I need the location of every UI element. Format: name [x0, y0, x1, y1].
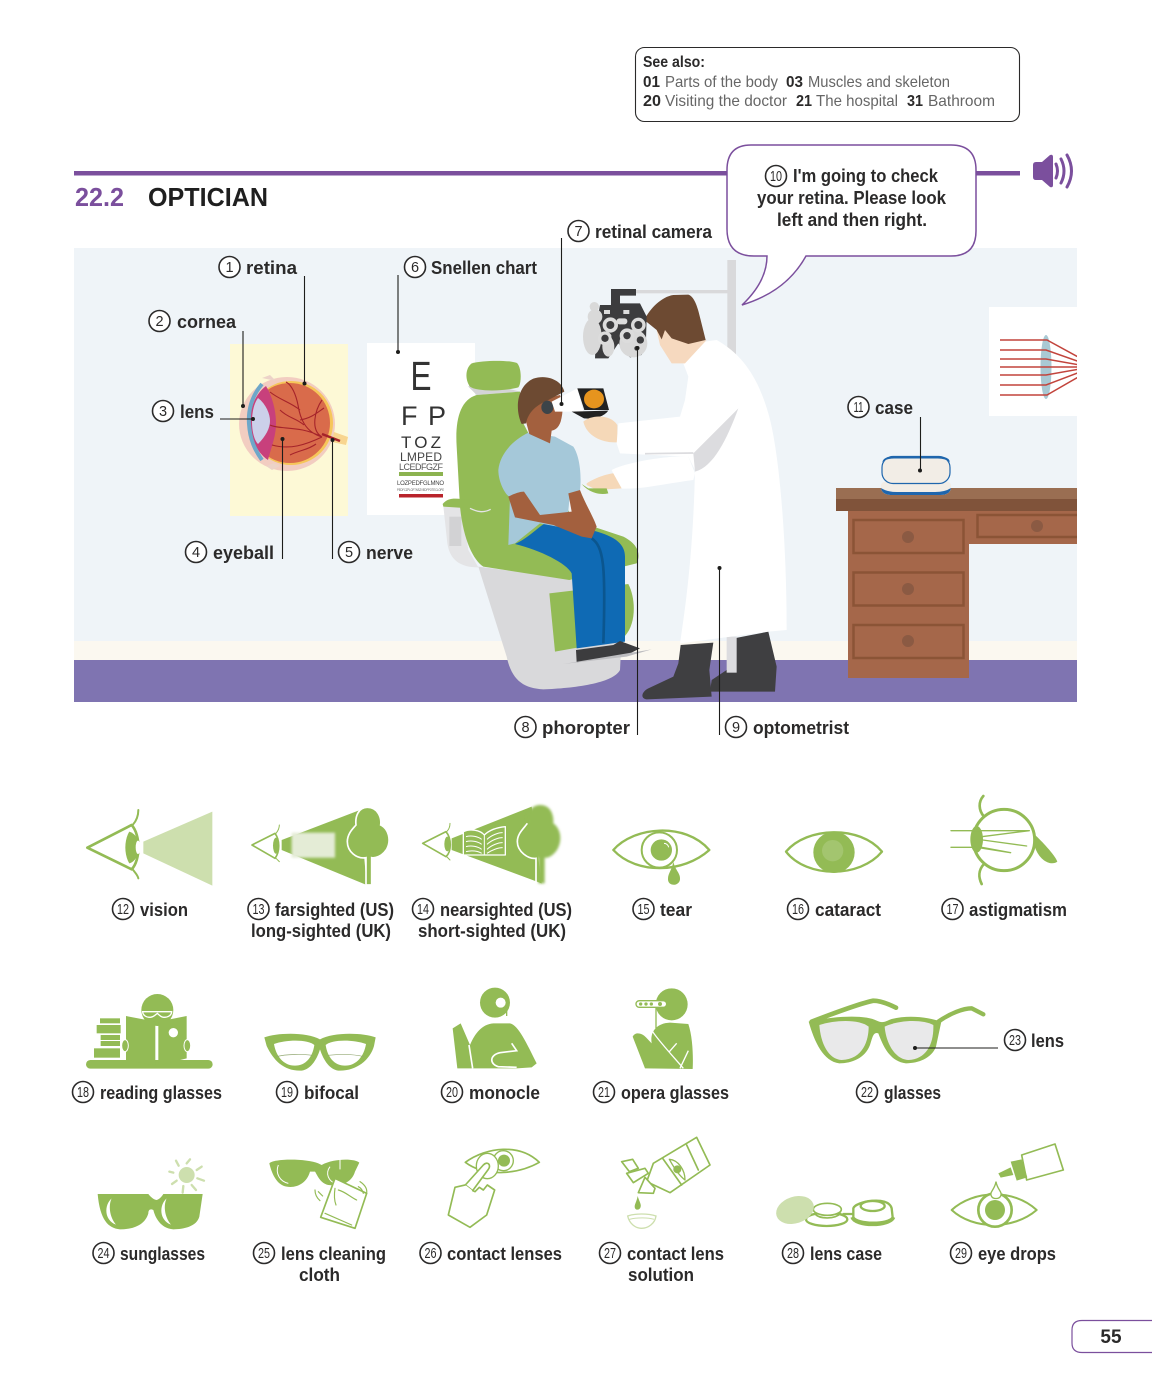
label: 9 optometrist: optometrist [753, 718, 849, 738]
glasses case [881, 456, 951, 495]
icon: lens case [772, 1191, 894, 1229]
label: 19 bifocal [276, 1082, 359, 1103]
label: 15 tear: tear [660, 900, 692, 920]
label: 21 opera glasses: 21 [598, 1085, 610, 1101]
label: 13 farsighted [248, 898, 394, 941]
panel: see also: Visiting the doctor [665, 93, 788, 110]
panel: see also: Muscles and skeleton [808, 74, 950, 91]
label: 21 opera glasses: opera glasses [621, 1083, 729, 1103]
speech bubble: 10 [770, 169, 782, 185]
label: 11 case: 11 [854, 400, 864, 416]
heading rule [74, 171, 1020, 176]
poster: Snellen chart: TOZ [401, 433, 441, 452]
label: 12 vision: vision [140, 900, 188, 920]
label: 14 nearsighted: nearsighted (US) [440, 900, 572, 920]
panel: see also: Bathroom [928, 93, 995, 110]
heading: 22.2 optician [75, 182, 268, 212]
patient [498, 377, 652, 664]
label: 14 nearsighted: short-sighted (UK) [418, 921, 566, 941]
label: 2 cornea [149, 310, 245, 408]
panel: see also: 03 [786, 74, 803, 91]
label: 18 reading glasses: 18 [77, 1085, 89, 1101]
panel: see also: 21 [796, 93, 812, 110]
label: 3 lens: lens [180, 402, 214, 422]
label: 24 sunglasses: sunglasses [120, 1244, 205, 1264]
label: 27 contact lens solution [600, 1242, 724, 1285]
label: 5 nerve: 5 [345, 545, 353, 561]
icon: cataract [786, 832, 882, 873]
label: 25 lens cleaning cloth: cloth [299, 1265, 340, 1285]
label: 25 lens cleaning cloth [254, 1242, 386, 1285]
label: 14 nearsighted: 14 [417, 902, 429, 918]
label: 28 lens case: lens case [810, 1244, 882, 1264]
label: 23 lens [913, 1030, 1064, 1051]
label: 24 sunglasses [93, 1242, 205, 1264]
icon: reading glasses [86, 994, 213, 1069]
label: 7 retinal camera [560, 220, 713, 406]
poster: Snellen chart: P [428, 401, 446, 431]
icon: lens cleaning cloth [269, 1158, 367, 1228]
label: 20 monocle [442, 1082, 540, 1103]
label: 1 retina [219, 256, 306, 386]
poster: Snellen chart: E [410, 353, 432, 399]
label: 4 eyeball: 4 [192, 545, 200, 561]
label: 20 monocle: monocle [469, 1083, 540, 1103]
panel: see also: See also: [643, 54, 705, 71]
label: 28 lens case [782, 1242, 882, 1264]
icon: contact lens solution [622, 1137, 710, 1228]
label: 24 sunglasses: 24 [98, 1246, 110, 1262]
panel: see also [636, 48, 1020, 122]
heading: 22.2 optician: 22.2 [75, 182, 124, 212]
chair [443, 361, 639, 689]
illustration: chair, patient, optometrist [443, 260, 787, 699]
label: 21 opera glasses [594, 1082, 729, 1103]
label: 5 nerve: nerve [366, 543, 413, 563]
icon: contact lenses [448, 1149, 539, 1227]
page number: 55 [1100, 1327, 1122, 1348]
label: 29 eye drops [950, 1242, 1056, 1264]
poster: Snellen chart: LOZPEDFGLMNO [397, 481, 444, 487]
label: 1 retina: 1 [225, 260, 234, 276]
retinal camera device [552, 388, 609, 419]
label: 22 glasses: 22 [861, 1085, 873, 1101]
speech bubble: your retina. Please look [757, 188, 947, 208]
instrument stand [636, 260, 736, 354]
label: 5 nerve [330, 438, 413, 563]
speech bubble: left and then right. [777, 210, 927, 230]
panel: optician room scene [74, 248, 1080, 702]
label: 29 eye drops: eye drops [978, 1244, 1056, 1264]
desk [836, 488, 1080, 678]
label: 7 retinal camera: retinal camera [595, 222, 713, 242]
phoropter [583, 289, 647, 358]
poster: Snellen chart: LCEDFGZF [399, 462, 444, 472]
label: 26 contact lenses: contact lenses [447, 1244, 562, 1264]
poster: eye anatomy [230, 344, 348, 516]
label: 8 phoropter: 8 [521, 720, 530, 736]
speech bubble [727, 145, 976, 305]
label: 22 glasses [856, 1082, 941, 1103]
label: 25 lens cleaning cloth: 25 [258, 1246, 270, 1262]
panel: see also: 20 [643, 93, 661, 110]
label: 11 case [848, 396, 922, 472]
poster: Snellen chart: F [401, 401, 418, 431]
label: 3 lens [152, 400, 255, 422]
label: 26 contact lenses: 26 [424, 1246, 436, 1262]
icon: farsighted [252, 807, 389, 885]
label: 2 cornea: 2 [155, 314, 164, 330]
label: 14 nearsighted [412, 898, 572, 941]
label: 17 astigmatism: 17 [946, 902, 958, 918]
label: 9 optometrist [718, 566, 849, 738]
poster: Snellen chart: PEDFCZPLOFTNSZVEDFPOTECLOPE [397, 488, 444, 492]
panel: see also: Parts of the body [665, 74, 778, 91]
label: 2 cornea: cornea [177, 312, 237, 332]
label: 1 retina: retina [246, 258, 298, 278]
poster: Snellen chart [367, 343, 475, 515]
label: 27 contact lens solution: 27 [604, 1246, 616, 1262]
label: 18 reading glasses: reading glasses [100, 1083, 222, 1103]
panel: see also: The hospital [816, 93, 898, 110]
panel: see also: 31 [907, 93, 923, 110]
icon: bifocal [264, 1034, 376, 1071]
label: 23 lens: 23 [1009, 1033, 1021, 1049]
label: 13 farsighted: 13 [252, 902, 264, 918]
label: 19 bifocal: bifocal [304, 1083, 359, 1103]
label: 6 Snellen chart [396, 256, 537, 354]
icon: sunglasses [98, 1159, 204, 1229]
speech bubble: I'm going to check [793, 166, 939, 186]
icon: opera glasses [633, 988, 693, 1069]
label: 8 phoropter [515, 346, 640, 738]
skirting [74, 641, 1077, 660]
label: 13 farsighted: farsighted (US) [275, 900, 394, 920]
label: 19 bifocal: 19 [281, 1085, 293, 1101]
label: 28 lens case: 28 [787, 1246, 799, 1262]
icon: eye drops [952, 1144, 1063, 1227]
icon: vision [87, 810, 212, 886]
heading: 22.2 optician: OPTICIAN [148, 182, 268, 212]
optometrist [582, 295, 787, 699]
icon: nearsighted [423, 805, 560, 883]
label: 8 phoropter: phoropter [542, 718, 630, 738]
label: 15 tear [633, 898, 692, 920]
label: 20 monocle: 20 [446, 1085, 458, 1101]
page number [1072, 1320, 1152, 1352]
label: 6 Snellen chart: Snellen chart [431, 258, 537, 278]
label: 27 contact lens solution: solution [628, 1265, 694, 1285]
label: 25 lens cleaning cloth: lens cleaning [281, 1244, 386, 1264]
icon: astigmatism [951, 796, 1057, 884]
wall [74, 248, 1077, 641]
label: 4 eyeball [186, 437, 284, 563]
label: 13 farsighted: long-sighted (UK) [251, 921, 391, 941]
label: 17 astigmatism [942, 898, 1067, 920]
label: 16 cataract: 16 [792, 902, 804, 918]
label: 3 lens: 3 [159, 404, 167, 420]
panel: see also: 01 [643, 74, 660, 91]
poster: lens diagram [989, 307, 1080, 416]
label: 16 cataract [788, 898, 881, 920]
icon: monocle [453, 988, 537, 1068]
label: 4 eyeball: eyeball [213, 543, 274, 563]
label: 17 astigmatism: astigmatism [969, 900, 1067, 920]
label: 11 case: case [875, 398, 913, 418]
label: 16 cataract: cataract [815, 900, 881, 920]
poster: Snellen chart: LMPED [400, 450, 442, 464]
icon: glasses [809, 1001, 983, 1063]
label: 9 optometrist: 9 [732, 720, 740, 736]
label: 22 glasses: glasses [884, 1083, 941, 1103]
icon: audio speaker [1033, 155, 1072, 187]
label: 6 Snellen chart: 6 [411, 260, 419, 276]
label: 18 reading glasses [72, 1082, 222, 1103]
label: 12 vision [112, 898, 188, 920]
label: 12 vision: 12 [117, 902, 129, 918]
floor [74, 660, 1077, 702]
label: 27 contact lens solution: contact lens [627, 1244, 724, 1264]
label: 15 tear: 15 [638, 902, 650, 918]
label: 23 lens: lens [1031, 1031, 1064, 1051]
icon: tear [613, 831, 709, 885]
label: 29 eye drops: 29 [955, 1246, 967, 1262]
label: 7 retinal camera: 7 [574, 224, 583, 240]
